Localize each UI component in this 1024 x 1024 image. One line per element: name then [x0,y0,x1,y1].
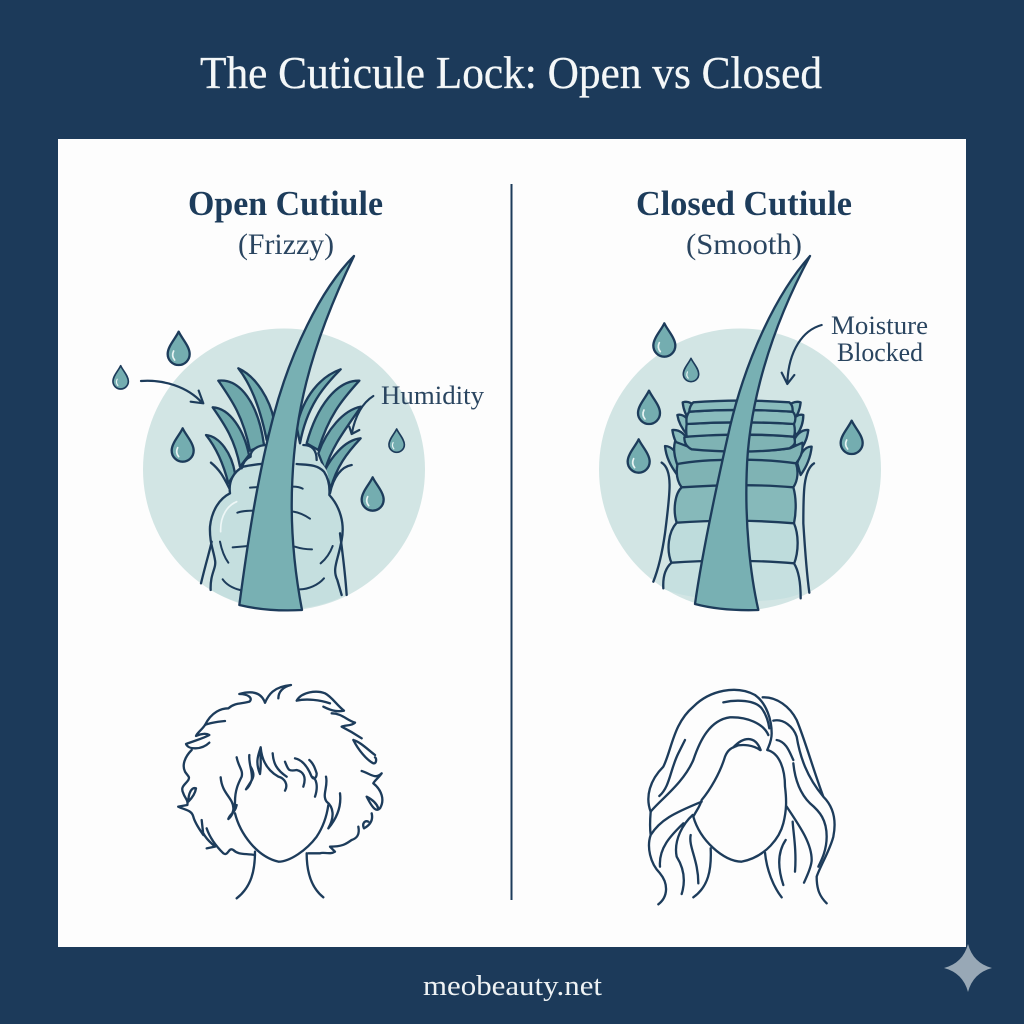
footer: website: meobeauty.net [423,971,602,1002]
panel: closed cuticle [599,184,928,904]
white content panel [58,139,966,947]
title: The Cuticule Lock: Open vs Closed [200,48,822,98]
arrow: right humidity arrow [349,396,373,434]
background circle [143,328,425,610]
illustration: open cuticle hair shaft [201,256,361,610]
icon: sparkle star [944,944,992,992]
water droplets: humidity [113,332,404,511]
arrow: left humidity arrow [141,381,203,403]
illustration: closed cuticle hair shaft [653,256,814,610]
arrow: moisture blocked [782,325,822,384]
subheading: smooth: (Smooth) [686,228,802,261]
icon: smooth hair head [648,690,835,904]
label: humidity: Humidity [381,381,484,410]
label: moisture blocked: Blocked [837,338,923,367]
heading: closed cuticle: Closed Cutiule [636,184,852,223]
water droplets: blocked moisture [628,323,863,473]
label: moisture blocked: Moisture [831,311,928,340]
panel: open cuticle [113,184,484,898]
subheading: frizzy: (Frizzy) [238,228,334,261]
background circle [599,328,881,610]
label: moisture blocked [831,311,928,367]
cuticle bulb [209,445,343,609]
heading: open cuticle: Open Cutiule [188,184,383,223]
icon: frizzy hair head [178,685,382,898]
